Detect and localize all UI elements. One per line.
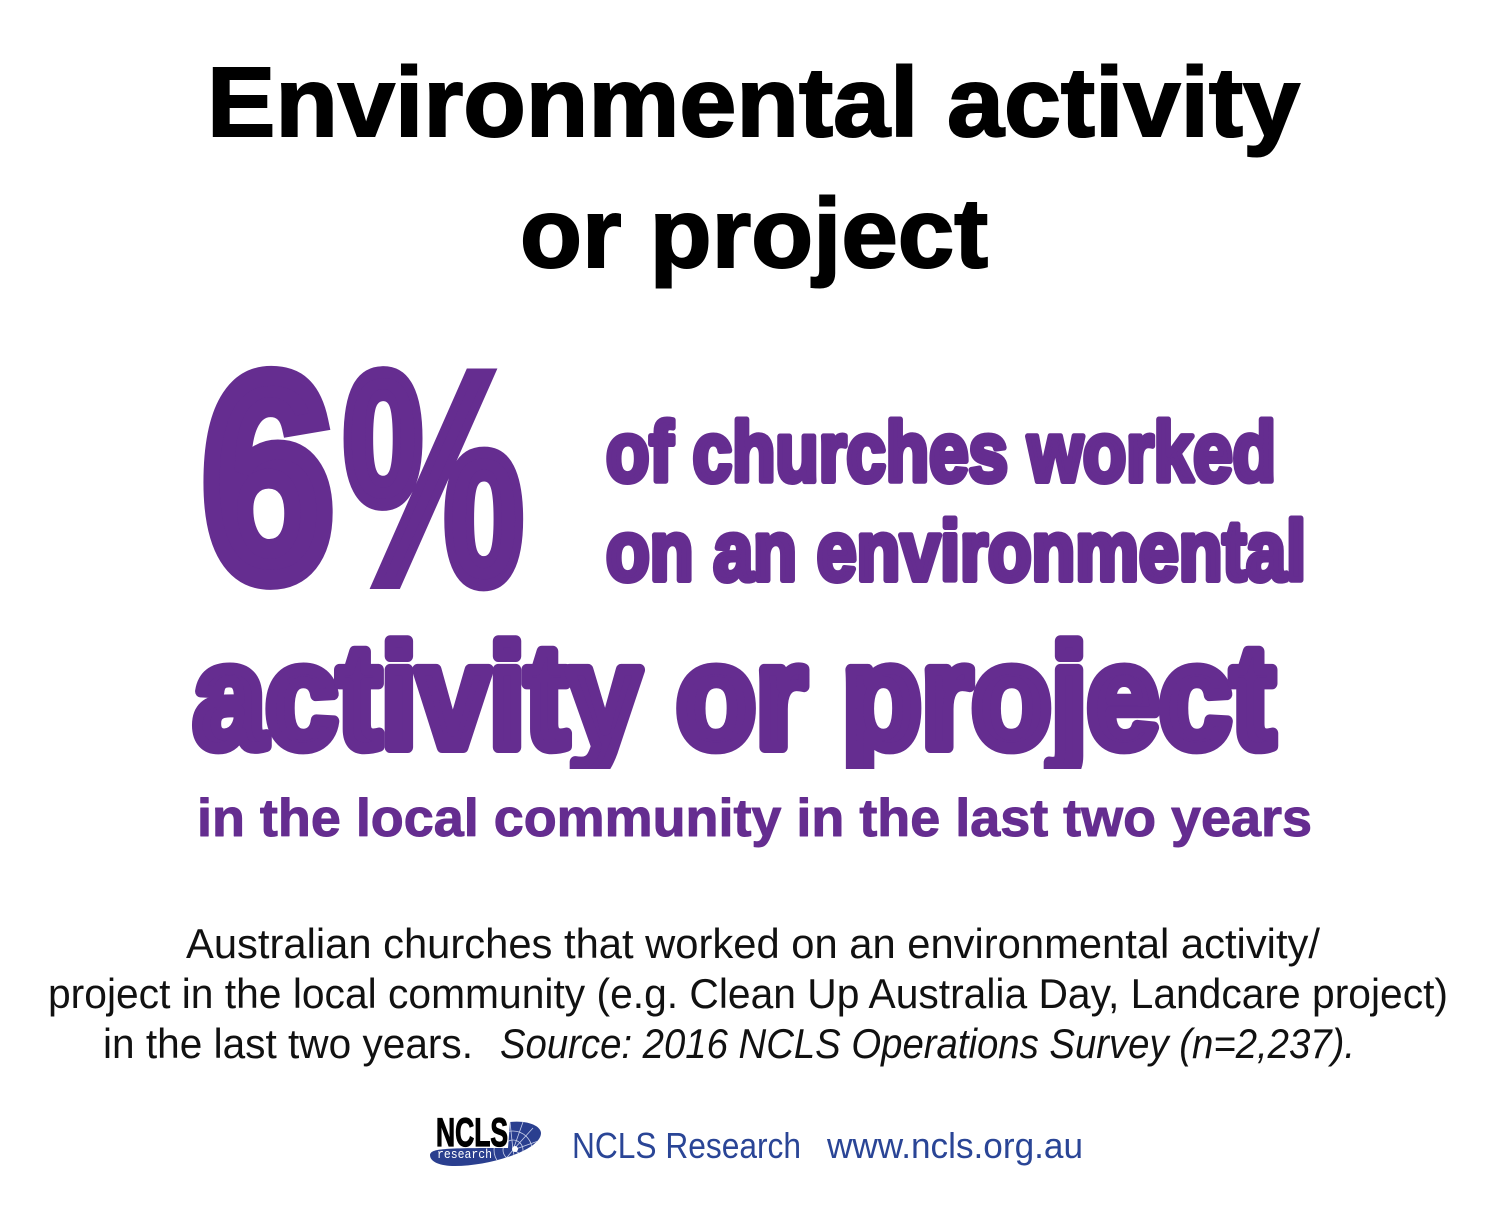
- footer organisation and website: www.ncls.org.au: [826, 1125, 1083, 1166]
- source note: project in the local community (e.g. Clean Up Australia Day, Landcare project): [48, 970, 1448, 1017]
- footer organisation and website: [572, 1125, 1083, 1166]
- title: Environmental activity: [207, 47, 1300, 157]
- icon: NCLS Research logo: [430, 1117, 541, 1166]
- statistic description: of churches worked: [606, 405, 1276, 499]
- source note: [48, 920, 1448, 1067]
- source note: Source: 2016 NCLS Operations Survey (n=2,237).: [500, 1020, 1355, 1067]
- big statistic: 6%: 6: [203, 317, 333, 639]
- icon: NCLS Research logo: NCLS: [436, 1111, 508, 1155]
- statistic description: activity or project: [194, 615, 1274, 778]
- statistic description: on an environmental: [606, 504, 1306, 598]
- statistic description: in the local community in the last two years: [197, 789, 1312, 848]
- source note: Australian churches that worked on an environmental activity/: [186, 920, 1320, 967]
- source note: in the last two years.: [103, 1020, 473, 1067]
- footer organisation and website: NCLS Research: [572, 1125, 801, 1166]
- big statistic: 6%: [203, 310, 524, 648]
- title: or project: [520, 178, 988, 288]
- statistic description: [194, 405, 1312, 848]
- icon: NCLS Research logo: research: [437, 1148, 492, 1162]
- big statistic: 6%: %: [342, 310, 524, 648]
- title: [207, 47, 1300, 288]
